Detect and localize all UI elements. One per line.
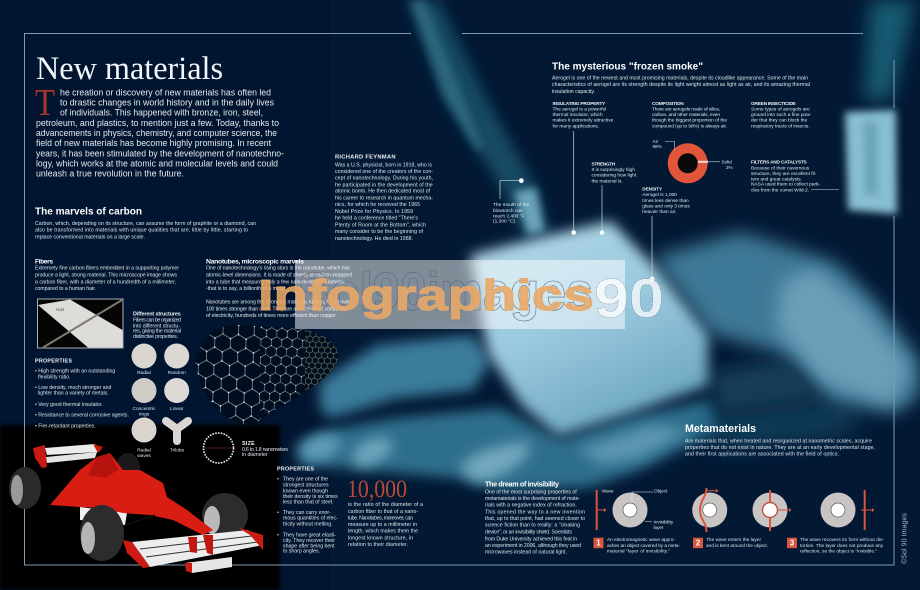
- metamaterials text: properties that do not exist in nature. They are at an early developmental stage,: [685, 445, 875, 451]
- nanotubes text: 100 times stronger than steel. They are also excellent conductors: [206, 306, 349, 312]
- richard feynman bio: he held a conference titled "There's: [335, 216, 418, 222]
- the dream of invisibility text: metamaterials is the development of mate-: [485, 496, 580, 502]
- step 1 caption: 1: [596, 538, 601, 548]
- intro text with drop cap: he creation or discovery of new materials has often led: [60, 88, 271, 98]
- callout: density: DENSITY: [642, 187, 663, 193]
- richard feynman bio: cept of nanotechnology. During his youth,: [335, 176, 433, 182]
- race car illustration: [9, 444, 263, 573]
- properties of nanotubes: They can carry enor-: [283, 510, 331, 516]
- donut chart: air 98%, solid 2%: Air: [652, 139, 659, 144]
- nanotubes text: Nanotubes are among the strongest materials known, being over: [206, 299, 350, 305]
- intro text with drop cap: advancements in physics, chemistry, and computer science, the: [36, 128, 277, 138]
- nanotubes text: One of nanotechnology's rising stars is the nanotube, which has: [206, 266, 350, 272]
- stat: 10,000: longest known structure, in: [348, 535, 413, 541]
- nanotube size diagram: [204, 433, 288, 463]
- the dream of invisibility text: science fiction than to reality: a "cloaking: [485, 523, 580, 529]
- fiber structure circles: Concentric: [133, 406, 156, 412]
- the dream of invisibility text: rials with a negative index of refraction.: [485, 503, 577, 509]
- properties of nanotubes: shape after being bent: [283, 543, 335, 549]
- intro text with drop cap: to drastic changes in world history and in the daily lives: [60, 98, 274, 108]
- intro text with drop cap: petroleum, and plastics, to mention just a few. Today, thanks to: [36, 118, 279, 128]
- the dream of invisibility text: microwaves instead of natural light.: [485, 550, 567, 556]
- diagram step 1: wave approaches: [597, 488, 674, 530]
- properties of fibers: • Low density, much stronger and: [35, 385, 112, 391]
- panel: fibers text: produce a light, strong material. This microscope image shows: [35, 272, 177, 278]
- properties of nanotubes: less than that of steel.: [283, 499, 333, 505]
- panel: fibers text: [35, 258, 179, 292]
- microscope image of fiber and hair: Hair: [56, 307, 65, 312]
- stat: 10,000: length, which makes them the: [348, 529, 418, 535]
- properties of nanotubes: strongest structures: [283, 483, 329, 489]
- callout: filters and catalysts: [751, 160, 839, 193]
- properties of nanotubes: their density is six times: [283, 494, 338, 500]
- callout: insulating property: makes it extremely attractive: [552, 118, 614, 124]
- panel: fibers text: compared to a human hair.: [35, 286, 96, 292]
- heading: metamaterials: Metamaterials: [685, 423, 756, 435]
- properties of nanotubes: city. They recover their: [283, 538, 335, 544]
- callout: blowtorch: [493, 178, 530, 225]
- callout: filters and catalysts: FILTERS AND CATALYSTS: [751, 160, 808, 166]
- callout: filters and catalysts: cles from the comet Wild-2.: [751, 187, 809, 193]
- nanotubes text: atomic-level dimensions. It is made of sheets of carbon wrapped: [206, 272, 352, 278]
- callout: insulating property: for many applications.: [552, 123, 599, 129]
- callout: green insecticide: Some types of aerogels are: [751, 106, 810, 112]
- properties of nanotubes: •: [277, 510, 279, 516]
- step 2 caption: The wave enters the layer: [706, 537, 761, 542]
- different structures text: distinctive properties.: [133, 334, 178, 340]
- stat: 10,000: measure up to a millimeter in: [348, 522, 417, 528]
- black backdrop behind race car: [0, 425, 280, 590]
- frozen smoke intro: [552, 75, 810, 95]
- panel: fibers text: Extremely fine carbon fibers embedded in a supporting polymer: [35, 266, 179, 272]
- nanotube size diagram: SIZE: [242, 441, 255, 447]
- diagram step 3: wave inside layer: [752, 490, 792, 531]
- callout: strength: It is surprisingly high: [592, 167, 635, 173]
- metamaterials text: and their first applications are associated with the field of optics.: [685, 452, 839, 458]
- different structures text: [133, 312, 181, 340]
- the dream of invisibility text: device", or an invisibility shield. Scientists: [485, 530, 572, 536]
- stat: 10,000: tube. Nanotubes, moreover, can: [348, 516, 413, 522]
- the dream of invisibility text: One of the most surprising properties of: [485, 489, 577, 495]
- properties of fibers: • High strength with an outstanding: [35, 369, 115, 375]
- callout: filters and catalysts: ters and great catalysts.: [751, 176, 802, 182]
- callout: blowtorch: reach 2,400 °F: [493, 213, 525, 219]
- donut chart: air 98%, solid 2%: [652, 139, 733, 183]
- watermark: 90: [594, 267, 664, 329]
- frozen smoke heading: The mysterious "frozen smoke": [552, 60, 703, 72]
- diagram step 2: wave bends around object: [692, 488, 727, 532]
- callout: strength: STRENGTH: [592, 162, 616, 168]
- fiber structure circles: Radial: [137, 448, 151, 454]
- heading: the marvels of carbon: The marvels of carbon: [35, 206, 142, 218]
- properties of nanotubes: PROPERTIES: [277, 467, 314, 473]
- properties of fibers: flexibility ratio.: [38, 374, 71, 380]
- intro text with drop cap: [35, 82, 284, 178]
- callout: filters and catalysts: structure, they are excellent fil-: [751, 171, 817, 177]
- properties of nanotubes: tricity without melting.: [283, 521, 333, 527]
- richard feynman bio: he participated in the development of the: [335, 182, 433, 188]
- callout: insulating property: The aerogel is a powerful: [552, 106, 606, 112]
- the dream of invisibility text: that, up to that point, had seemed closer to: [485, 516, 585, 522]
- frozen smoke intro: Aerogel is one of the newest and most promising materials, despite its cloudlike appearance. Some of the main: [552, 75, 808, 81]
- metamaterials text: [685, 438, 875, 458]
- step 3 caption: The wave recovers its form without dis-: [800, 537, 884, 542]
- callout: composition: [652, 101, 727, 129]
- nanotubes text: Nanotubes, microscopic marvels: [206, 258, 304, 266]
- nanotube size diagram: 0.6 to 1.8 nanometers: [242, 447, 288, 453]
- intro text with drop cap: logy, which works at the atomic and molecular levels and could: [36, 158, 278, 168]
- properties of fibers: [35, 358, 129, 430]
- stat: 10,000: [347, 476, 423, 548]
- callout: green insecticide: [751, 101, 812, 129]
- the dream of invisibility text: [485, 480, 585, 556]
- intro text with drop cap: of individuals. This happened with bronze, iron, steel,: [60, 108, 263, 118]
- richard feynman bio: RICHARD FEYNMAN: [335, 155, 396, 161]
- step 2 caption: [693, 537, 768, 548]
- different structures text: Different structures: [133, 312, 181, 318]
- step 1 caption: material "layer of invisibility.": [607, 549, 670, 554]
- richard feynman bio: nics, for which he received the 1965: [335, 202, 420, 208]
- properties of fibers: PROPERTIES: [35, 358, 72, 364]
- carbon text: also be transformed into materials with unique qualities that are, little by little, starting to: [35, 228, 248, 234]
- callout: filters and catalysts: Because of their cavernous: [751, 166, 810, 172]
- nanotubes text: into a tube that measures only a few nanometers in diameter: [206, 279, 345, 285]
- properties of fibers: • Fire-retardant properties.: [35, 424, 96, 430]
- properties of fibers: • Resistance to several corrosive agents.: [35, 413, 129, 419]
- panel: fibers text: Fibers: [35, 258, 53, 266]
- step 2 caption: and is bent around the object.: [706, 543, 768, 548]
- watermark: Infographics: [258, 271, 594, 320]
- donut chart: air 98%, solid 2%: 2%: [726, 165, 733, 170]
- properties of nanotubes: They are one of the: [283, 477, 328, 483]
- step 1 caption: An electromagnetic wave appro-: [607, 537, 675, 542]
- carbon text: replace conventional materials on a large scale.: [35, 234, 145, 240]
- properties of nanotubes: •: [277, 477, 279, 483]
- microscope image of fiber and hair: [38, 299, 123, 348]
- step 3 caption: reflection, so the object is "invisible.": [800, 549, 877, 554]
- callout: green insecticide: der that they can block the: [751, 118, 808, 124]
- diagram step 1: wave approaches: Object: [654, 488, 668, 494]
- carbon text: [35, 221, 256, 240]
- stat: 10,000: is the ratio of the diameter of a: [348, 502, 423, 508]
- properties of fibers: • Very good thermal insulator.: [35, 402, 103, 408]
- properties of nanotubes: They have great elasti-: [283, 532, 336, 538]
- hand: right hand and thumb: [653, 232, 920, 413]
- nanotube lattice illustration: [195, 325, 338, 424]
- donut chart: air 98%, solid 2%: Solid: [722, 160, 732, 164]
- carbon text: Carbon, which, depending on its structure, can assume the form of graphite or a diamond, can: [35, 221, 256, 227]
- callout: density: heavier than air.: [642, 209, 676, 215]
- fiber structure circles: Trilobe: [170, 448, 185, 454]
- fiber structure circles: Radial: [137, 370, 151, 376]
- blowtorch: [408, 0, 550, 238]
- richard feynman bio: considered one of the creators of the con-: [335, 169, 433, 175]
- the dream of invisibility text: from Duke University achieved this feat in: [485, 536, 577, 542]
- step 2 caption: 2: [696, 538, 701, 548]
- callout: insulating property: [552, 101, 614, 235]
- fiber structure circles: [132, 344, 189, 459]
- callout: blowtorch: The mouth of the: [493, 202, 530, 208]
- watermark: Sol90images: [298, 262, 593, 322]
- callout: density: Aerogel is 1,000: [642, 192, 677, 198]
- richard feynman bio: Plenty of Room at the Bottom", which: [335, 222, 426, 228]
- stat: 10,000: 10,000: [347, 476, 407, 503]
- callout: green insecticide: GREEN INSECTICIDE: [751, 101, 797, 107]
- intro text with drop cap: years, it has been stimulated by the development of nanotechno-: [36, 148, 284, 158]
- diagram step 1: wave approaches: layer: [654, 525, 664, 530]
- step 3 caption: 3: [790, 538, 795, 548]
- properties of nanotubes: mous quantities of elec-: [283, 516, 338, 522]
- diagram step 4: wave recovers: [820, 490, 874, 530]
- richard feynman bio: many consider to be the beginning of: [335, 229, 424, 235]
- nanotubes text: -that is to say, a billionth of a meter.: [206, 286, 287, 292]
- callout: blowtorch: blowtorch can: [493, 208, 523, 214]
- properties of nanotubes: [277, 467, 338, 555]
- the dream of invisibility text: This opened the way to a new invention: [485, 510, 585, 516]
- frozen smoke intro: characteristics of aerogel are its strength despite its light weight almost as light as air, and its amazing thermal: [552, 82, 810, 88]
- title: New materials: [36, 51, 223, 87]
- callout: composition: There are aerogels made of silica,: [652, 106, 720, 112]
- the dream of invisibility text: an experiment in 2006, although they used: [485, 543, 581, 549]
- stat: 10,000: relation to their diameter.: [348, 542, 408, 548]
- richard feynman bio: [335, 155, 433, 242]
- callout: strength: [592, 162, 637, 235]
- metamaterials text: Are materials that, when treated and reorganized at nanometric scales, acquire: [685, 438, 872, 444]
- fiber structure circles: waves: [137, 454, 151, 459]
- intro text with drop cap: unleash a true revolution in the future.: [36, 168, 184, 178]
- nanotubes text: [206, 258, 352, 319]
- step 3 caption: tortion. The layer does not produce any: [800, 543, 884, 548]
- fiber structure circles: Linear: [170, 406, 184, 412]
- fiber structure circles: rings: [139, 412, 150, 418]
- panel: fibers text: a carbon fiber, with a diameter of a hundredth of a millimeter,: [35, 279, 176, 285]
- properties of fibers: lighter than a variety of metals.: [38, 391, 109, 397]
- properties of nanotubes: •: [277, 532, 279, 538]
- properties of nanotubes: known even though: [283, 488, 328, 494]
- callout: strength: considering how light: [592, 173, 637, 179]
- diagram step 1: wave approaches: Wave: [602, 488, 614, 494]
- richard feynman bio: his career to research in quantum mecha-: [335, 196, 433, 202]
- different structures text: Fibers can be organized: [133, 318, 181, 324]
- nanotubes text: of electricity, hundreds of times more efficient than copper.: [206, 313, 337, 319]
- richard feynman bio: atomic bomb. He then dedicated most of: [335, 189, 431, 195]
- donut chart: air 98%, solid 2%: 98%: [652, 144, 662, 149]
- callout: insulating property: thermal insulator, which: [552, 112, 603, 118]
- richard feynman bio: Was a U.S. physicist, born in 1918, who is: [335, 163, 432, 169]
- credit: ©Sol 90 Images: [900, 512, 908, 564]
- callout: composition: though the biggest proportion of the: [652, 118, 727, 124]
- richard feynman bio: Nobel Prize for Physics. In 1959: [335, 209, 413, 215]
- callout: density: [642, 187, 690, 281]
- aerogel cube held in hand: [470, 221, 708, 436]
- richard feynman bio: nanotechnology. He died in 1988.: [335, 236, 413, 242]
- diagram step 1: wave approaches: Invisibility: [654, 520, 674, 524]
- intro text with drop cap: T: [35, 82, 55, 124]
- nanotube size diagram: in diameter: [242, 452, 268, 458]
- callout: green insecticide: ground into such a fine pow-: [751, 112, 812, 118]
- step 1 caption: aches an object covered by a meta-: [607, 543, 680, 548]
- callout: strength: the material is.: [592, 178, 623, 184]
- callout: composition: compound (up to 98%) is always air.: [652, 123, 727, 129]
- frozen smoke intro: insulation capacity.: [552, 89, 595, 95]
- callout: density: times less dense than: [642, 198, 689, 204]
- callout: blowtorch: (1,300 °C).: [493, 219, 516, 225]
- properties of nanotubes: to sharp angles.: [283, 549, 320, 555]
- stat: 10,000: carbon fiber to that of a nano-: [348, 509, 418, 515]
- callout: insulating property: INSULATING PROPERTY: [552, 101, 606, 107]
- step 3 caption: [787, 537, 884, 554]
- step 1 caption: [594, 537, 680, 554]
- different structures text: into different structu-: [133, 323, 180, 329]
- aerogel sample block: [845, 0, 915, 214]
- intro text with drop cap: field of new materials has become highly promising. In recent: [36, 138, 271, 148]
- callout: density: glass and only 3 times: [642, 204, 690, 210]
- callout: composition: carbon, and other materials, even: [652, 112, 720, 118]
- different structures text: res, giving the material: [133, 329, 181, 335]
- hand: lower palm and fingers: [296, 400, 860, 490]
- hand: upper left finger: [320, 335, 490, 418]
- fiber structure circles: Random: [168, 370, 186, 376]
- callout: filters and catalysts: NASA used them to collect parti-: [751, 182, 820, 188]
- callout: green insecticide: respiratory tracts of insects.: [751, 123, 810, 129]
- callout: composition: COMPOSITION: [652, 101, 684, 107]
- the dream of invisibility text: The dream of invisibility: [485, 480, 559, 488]
